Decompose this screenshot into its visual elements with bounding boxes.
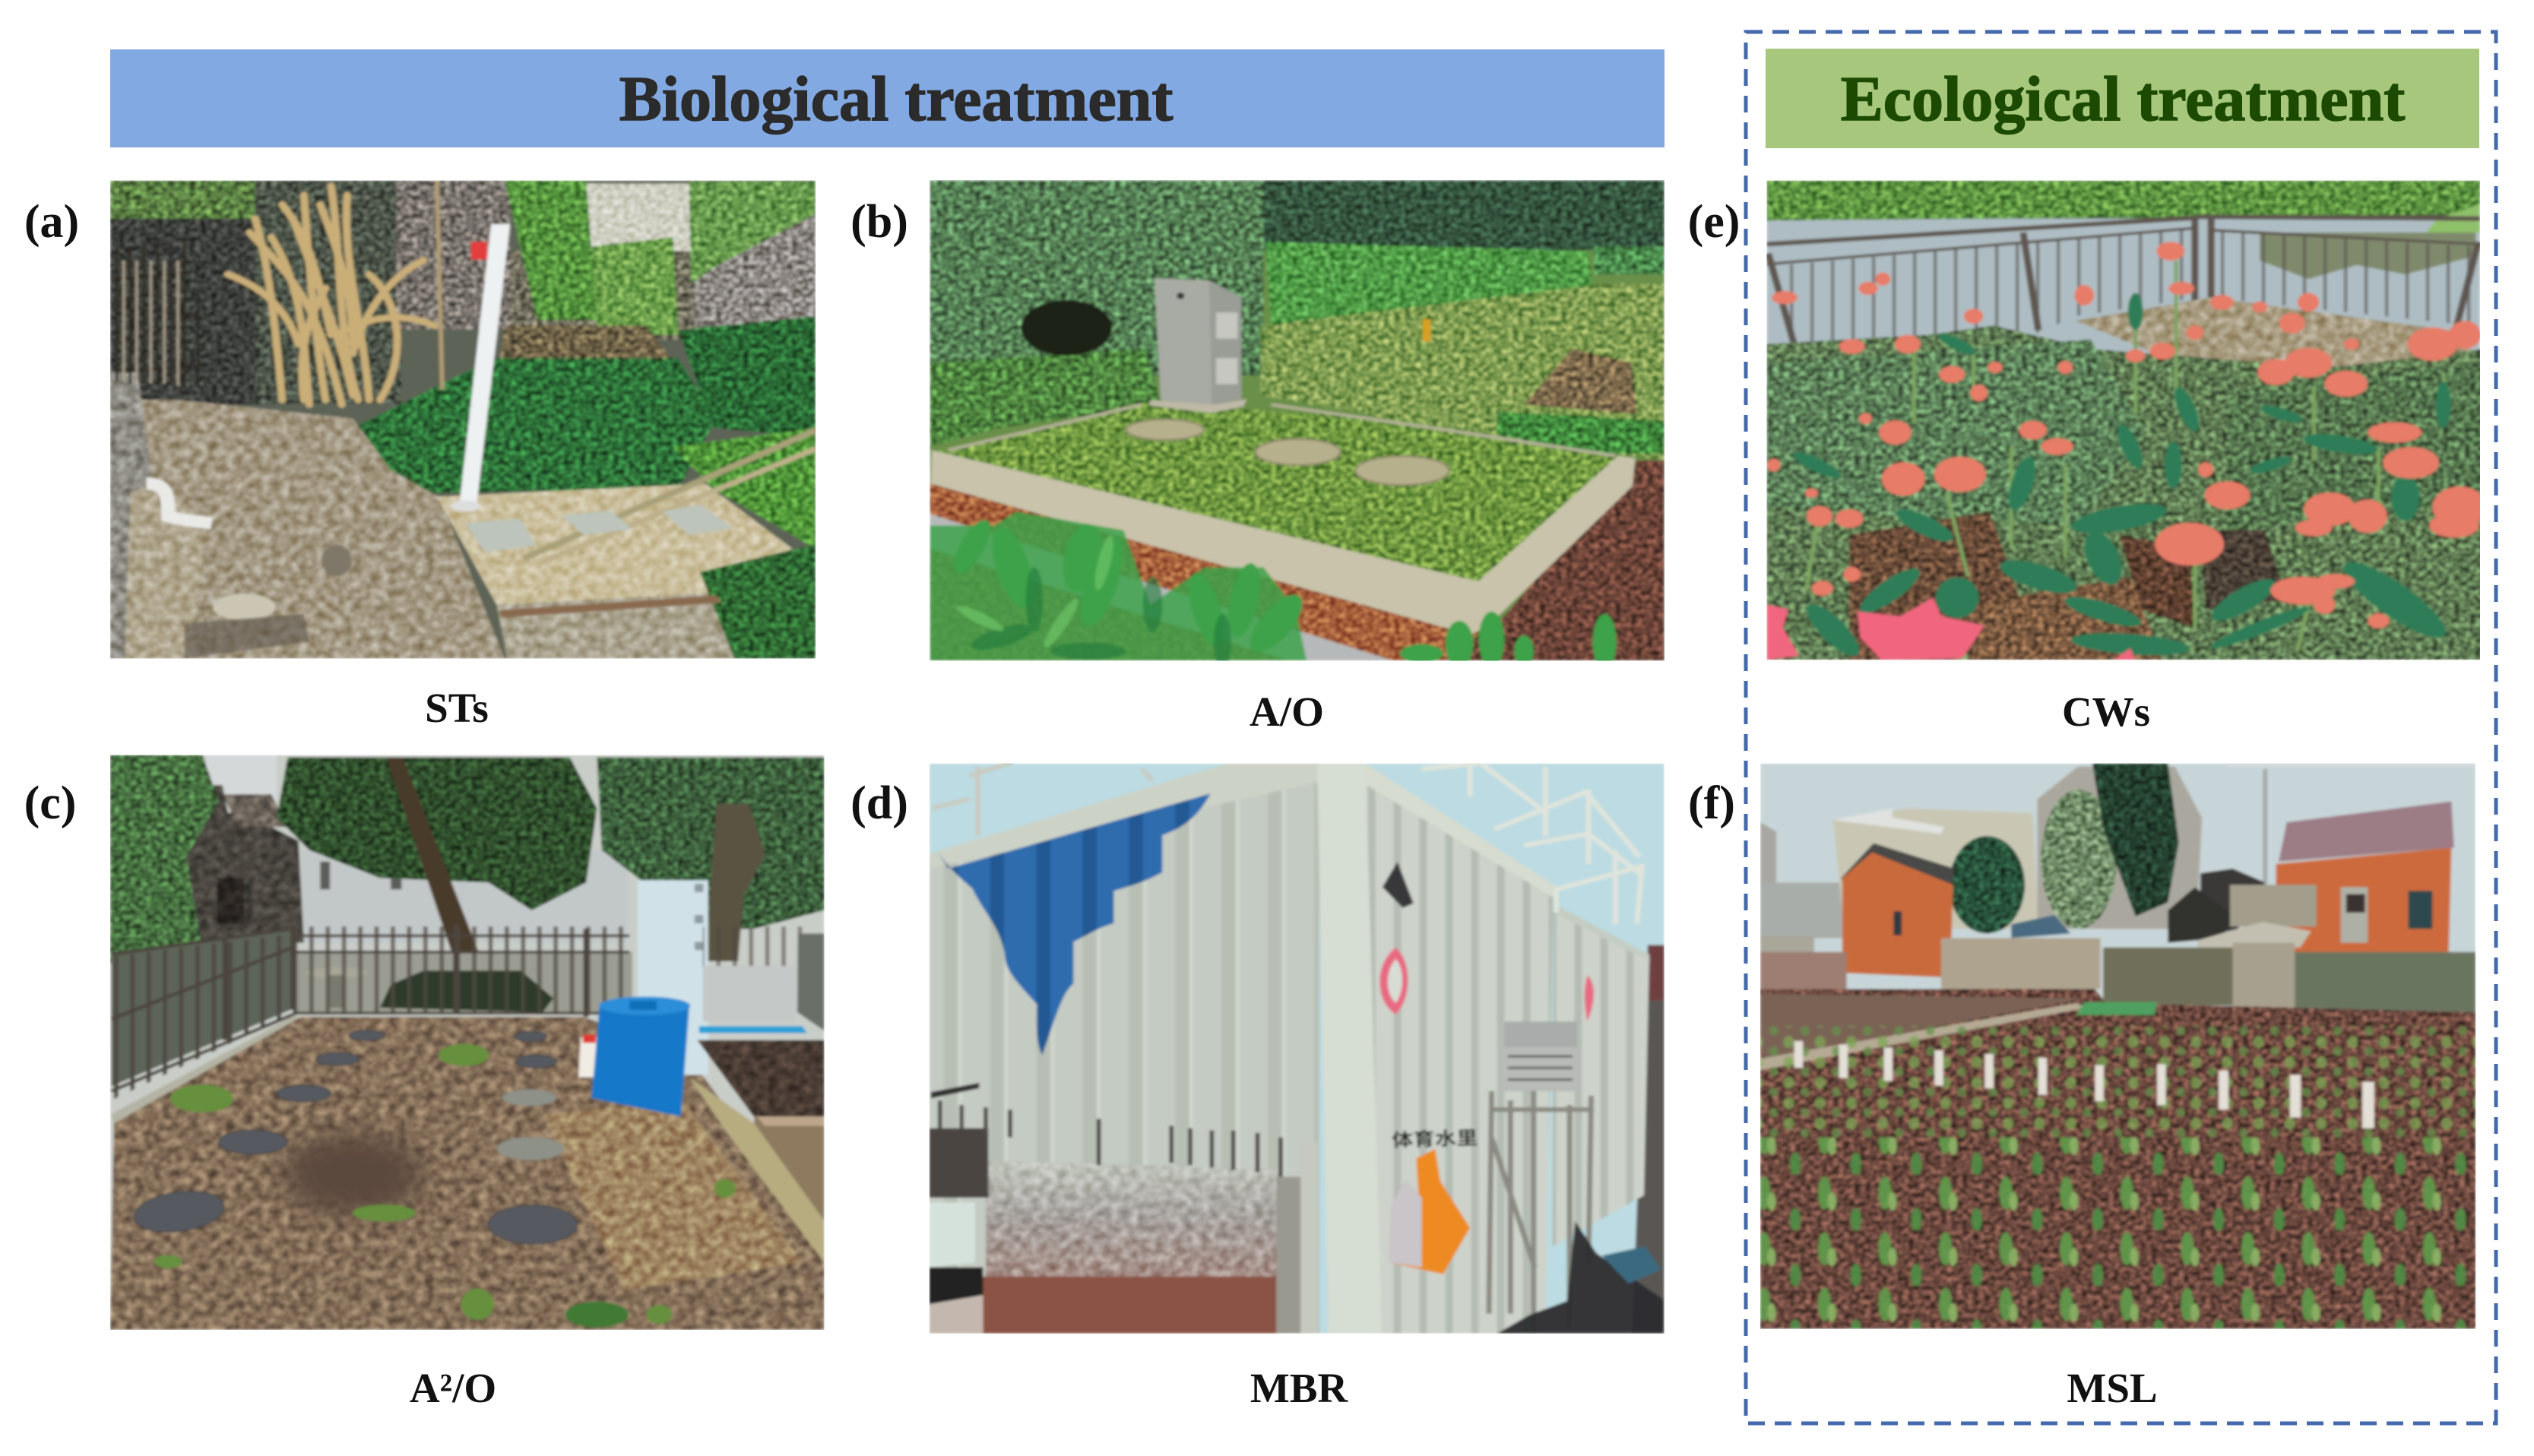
trees bbox=[1950, 764, 2179, 933]
seedling rows bbox=[1760, 1026, 2475, 1138]
triangular logo graphic bbox=[1383, 862, 1414, 908]
photo captions: CWs bbox=[2062, 688, 2150, 735]
photo e: constructed wetland bbox=[1766, 180, 2534, 663]
panel letters: (a) bbox=[24, 196, 79, 248]
left corner fence bbox=[111, 929, 296, 1087]
photo b: A/O system bbox=[930, 180, 1665, 669]
photo c: A2/O system bbox=[110, 755, 825, 1330]
gate bbox=[114, 239, 204, 388]
panel letters: (b) bbox=[850, 196, 908, 248]
dark wall far right bbox=[1648, 945, 1665, 1001]
pink logo graphic bbox=[1379, 948, 1408, 1014]
manhole lids bbox=[1126, 419, 1449, 485]
photo captions: STs bbox=[425, 685, 489, 731]
flower clusters bbox=[1767, 242, 2487, 628]
soil ground bbox=[110, 1017, 825, 1330]
bamboo poles bbox=[527, 430, 816, 562]
photo captions: MBR bbox=[1250, 1365, 1348, 1411]
tree trunks bbox=[386, 758, 479, 952]
leaves bbox=[1790, 293, 2456, 663]
inspection lids bbox=[466, 505, 733, 552]
distant buildings bbox=[1760, 822, 1776, 938]
photo captions bbox=[410, 685, 2158, 1411]
gate pickets bbox=[940, 1100, 1281, 1177]
discharge sign bbox=[1500, 1021, 1579, 1091]
vent pipe bbox=[459, 224, 510, 507]
container lettering: 体育水里 bbox=[1391, 1122, 1478, 1152]
planting bed bbox=[1766, 325, 2534, 660]
orange brick house left bbox=[1841, 843, 1955, 977]
railing bbox=[1766, 217, 2480, 358]
panel letters: (f) bbox=[1688, 777, 1735, 829]
ecological section dashed frame bbox=[1746, 32, 2496, 1423]
hedge bank bbox=[1766, 180, 2480, 220]
fence background bbox=[296, 952, 632, 1012]
pond water bbox=[1766, 219, 2480, 353]
concrete hut bbox=[2197, 885, 2317, 1008]
dark shed and pale wall buildings bbox=[2200, 869, 2265, 938]
right compound bbox=[703, 926, 806, 968]
left rooftop scaffold bbox=[932, 762, 1152, 836]
old house bbox=[179, 785, 304, 943]
right face bbox=[1365, 780, 1554, 1334]
main container left face bbox=[930, 769, 1319, 1334]
dark hollow bbox=[1021, 300, 1112, 356]
second container bbox=[1553, 905, 1650, 1246]
vent pipes bbox=[1794, 1041, 2374, 1128]
orange brick house right bbox=[2276, 802, 2454, 954]
photo f: multi-soil-layering bbox=[1760, 762, 2475, 1329]
panel letters: (d) bbox=[850, 777, 908, 829]
photo d: MBR container bbox=[930, 762, 1665, 1334]
weed patches bbox=[154, 1044, 736, 1328]
photo captions: A/O bbox=[1250, 688, 1324, 735]
heading: ecological treatment: Ecological treatment bbox=[1841, 64, 2405, 135]
white control cabinet bbox=[638, 880, 708, 1075]
pink foreground canna bbox=[1766, 597, 1984, 660]
heading: biological treatment: Biological treatment bbox=[619, 64, 1173, 135]
steel fence gate bbox=[1489, 1091, 1594, 1334]
blue corner graphic bbox=[932, 793, 1211, 1056]
heading: ecological treatment bbox=[1766, 49, 2479, 148]
reflective sliding gate bbox=[986, 1160, 1281, 1281]
photo captions: A²/O bbox=[410, 1365, 496, 1411]
orange notice bbox=[1389, 1149, 1470, 1274]
photo a: septic tanks bbox=[110, 180, 816, 659]
stems bbox=[1806, 261, 2444, 651]
panel letters bbox=[24, 196, 1740, 829]
rooftop railings bbox=[1421, 764, 1642, 924]
concrete curb bbox=[931, 450, 1636, 635]
panel letters: (e) bbox=[1688, 196, 1740, 248]
gate highlights bbox=[124, 261, 178, 386]
control cabinet bbox=[1149, 278, 1246, 413]
white canister bbox=[578, 1038, 597, 1078]
blue barrel bbox=[591, 996, 690, 1116]
manhole discs bbox=[130, 1030, 578, 1244]
corn stalks bbox=[228, 186, 434, 404]
canna leaves foreground bbox=[930, 511, 1617, 669]
garden walls bbox=[1941, 938, 2101, 989]
drain elbow bbox=[147, 483, 211, 523]
white building bbox=[301, 850, 627, 943]
heading: biological treatment bbox=[110, 49, 1665, 147]
photo captions: MSL bbox=[2067, 1365, 2158, 1411]
corner post bbox=[1317, 764, 1382, 1334]
soil field bbox=[1760, 989, 2475, 1329]
panel letters: (c) bbox=[24, 777, 76, 829]
